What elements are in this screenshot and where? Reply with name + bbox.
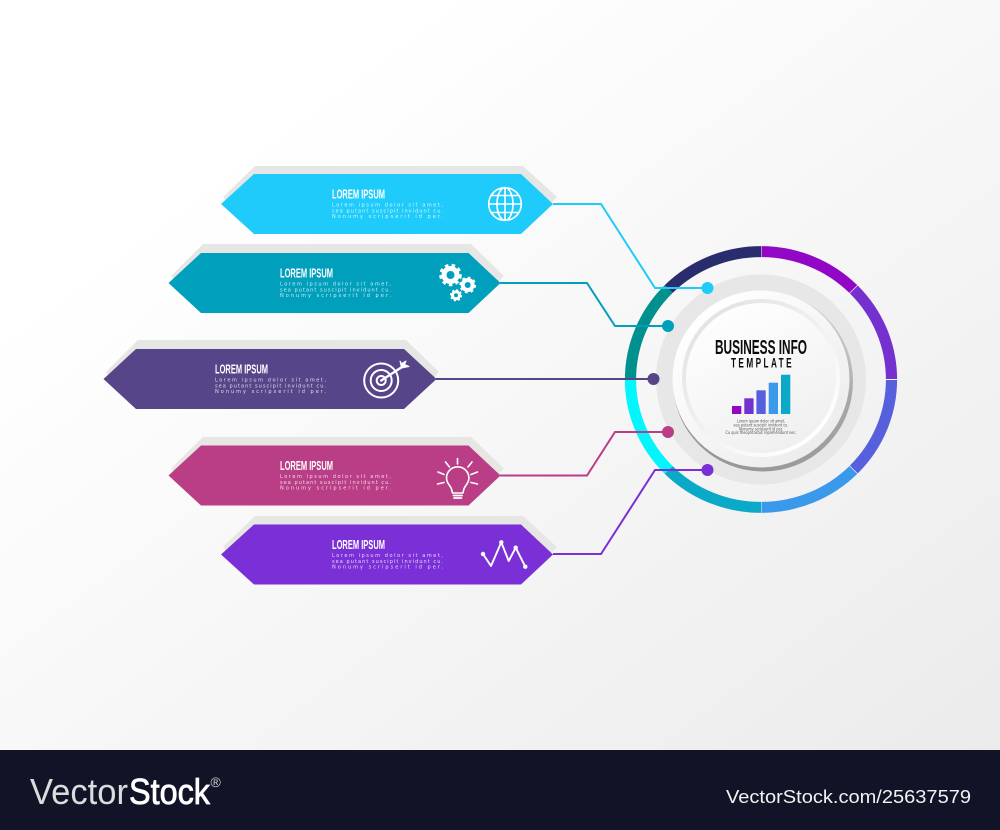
footer bar: [0, 750, 1000, 830]
title: BUSINESS INFO: [715, 337, 807, 359]
banner 2 body: [168, 253, 500, 313]
footer logo: Stock: [129, 771, 211, 812]
central caption: Nonumy scripserit id per.: [739, 426, 783, 432]
icon: gears: [440, 265, 475, 301]
banner 1 text: sea putant suscipit invidunt cu.: [332, 208, 443, 214]
panel: banner 2: [168, 244, 504, 313]
icon: light bulb: [438, 458, 478, 498]
banner 4 text: [280, 474, 391, 492]
ring segment: purple: [762, 252, 853, 289]
banner 4 shadow: [171, 437, 504, 506]
banner 4 heading: LOREM IPSUM: [280, 458, 333, 473]
banner 1 shadow: [223, 166, 557, 234]
banner 5 shadow: [223, 516, 557, 584]
banner 3 body: [104, 349, 436, 409]
footer logo: [30, 771, 211, 812]
banner 3 heading: LOREM IPSUM: [215, 362, 268, 376]
disc shadow: [673, 292, 853, 472]
connector 3: [436, 378, 653, 380]
banner 2 text: Nonumy scripserit id per.: [280, 293, 391, 299]
banner 5 text: sea putant suscipit invidunt cu.: [332, 559, 443, 565]
banner 1 text: Nonumy scripserit id per.: [332, 214, 443, 220]
dot 1: [702, 282, 714, 294]
banner 5 text: Nonumy scripserit id per.: [332, 565, 443, 571]
bar chart: [732, 375, 790, 414]
panel: banner 3: [104, 340, 439, 409]
banner 1 heading: LOREM IPSUM: [332, 186, 385, 202]
banner 1 body: [221, 174, 553, 234]
ring segment: blue-teal: [669, 470, 761, 507]
banner 1 text: Lorem ipsum dolor sit amet,: [332, 203, 443, 209]
banner 3 text: Nonumy scripserit id per.: [215, 389, 326, 395]
banner 3 text: sea putant suscipit invidunt cu.: [215, 383, 326, 389]
banner 4 text: sea putant suscipit invidunt cu.: [280, 480, 391, 486]
banner 3 shadow: [106, 340, 439, 409]
ring segment: navy: [669, 252, 761, 289]
icon: target: [364, 361, 409, 398]
connector 5: [553, 470, 707, 554]
panel: banner 5: [221, 516, 557, 584]
banner 2 heading: LOREM IPSUM: [280, 266, 333, 280]
dot 3: [648, 373, 660, 385]
ring segment: teal: [630, 289, 669, 380]
ring segment: violet: [854, 290, 892, 379]
icon: globe: [489, 188, 521, 220]
connector 1: [553, 204, 707, 288]
central caption: [726, 418, 796, 436]
top disc: [672, 290, 850, 468]
banner 2 text: [280, 282, 391, 299]
central caption: Lorem ipsum dolor sit amet,: [737, 418, 785, 424]
banner 4 text: Lorem ipsum dolor sit amet,: [280, 474, 391, 480]
banner 2 text: sea putant suscipit invidunt cu.: [280, 287, 391, 293]
connector dots: [648, 282, 714, 476]
grey disc: [656, 274, 866, 484]
panel: banner 1: [221, 166, 557, 234]
central circle: [630, 252, 892, 507]
icon: line graph: [481, 540, 528, 569]
banner 1 text: [332, 203, 443, 220]
footer logo: Vector: [30, 771, 128, 812]
banner 4 body: [168, 446, 500, 506]
banner 5 body: [221, 524, 553, 584]
banner 5 text: Lorem ipsum dolor sit amet,: [332, 553, 443, 559]
connector 2: [500, 283, 668, 326]
registered mark: ®: [210, 774, 222, 790]
dot 2: [662, 320, 674, 332]
segmented outer ring: [630, 252, 892, 507]
ring segment: cyan: [630, 380, 669, 470]
ring segment: sky blue: [762, 470, 853, 507]
banner 2 shadow: [171, 244, 504, 313]
banner 3 text: Lorem ipsum dolor sit amet,: [215, 378, 326, 384]
banner 5 heading: LOREM IPSUM: [332, 537, 385, 552]
central caption: sea putant suscipit invidunt cu.: [734, 422, 788, 428]
inner groove: [684, 301, 838, 455]
dot 5: [702, 464, 714, 476]
ring segment: indigo: [854, 380, 892, 469]
connector 4: [500, 432, 668, 476]
banner 2 text: Lorem ipsum dolor sit amet,: [280, 282, 391, 288]
footer url: VectorStock.com/25637579: [726, 786, 971, 807]
subtitle: TEMPLATE: [731, 356, 792, 371]
connector lines: [436, 204, 707, 554]
panel: banner 4: [168, 437, 504, 506]
banner 4 text: Nonumy scripserit id per.: [280, 486, 391, 492]
central heading: [715, 337, 807, 371]
banner 3 text: [215, 378, 326, 395]
dot 4: [662, 426, 674, 438]
central caption: Cu quis theophrastus reprehendunt nec.: [726, 430, 796, 436]
banner 5 text: [332, 553, 443, 571]
